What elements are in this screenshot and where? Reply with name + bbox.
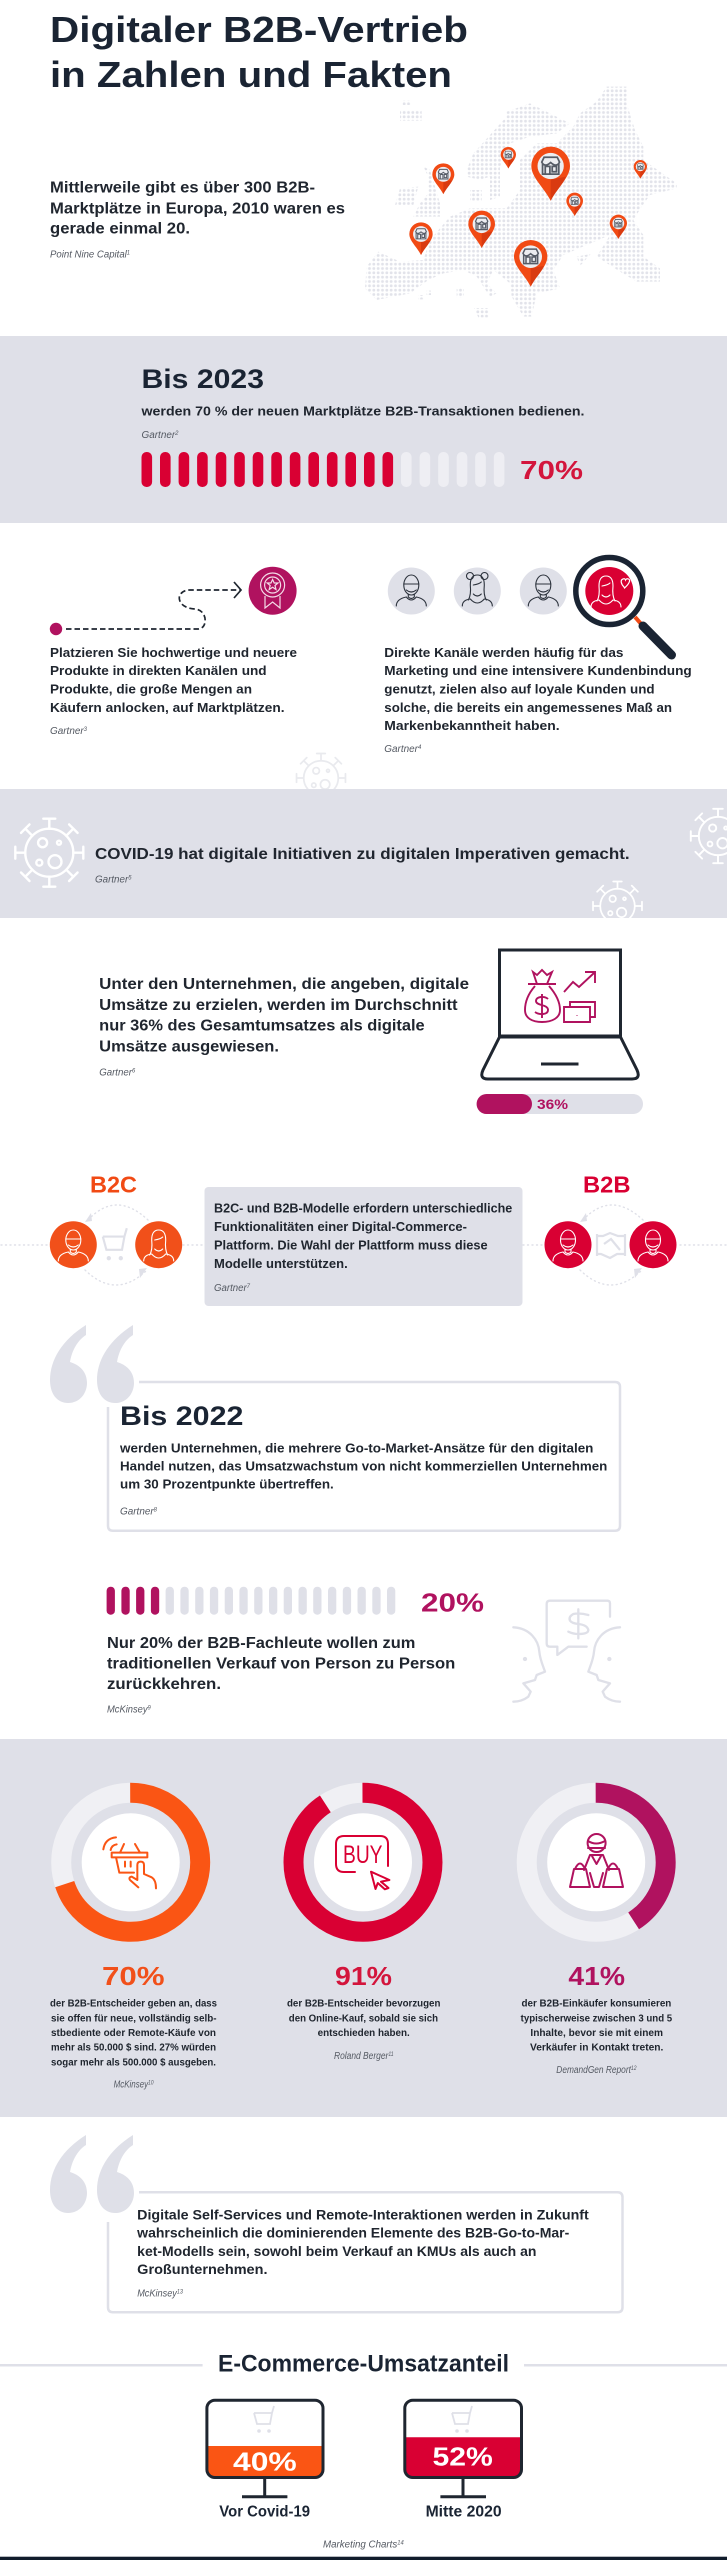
text: direct channels: [384, 646, 692, 755]
text: digital revenue: Umsätze zu erzielen, werden im Durchschnitt: [99, 997, 458, 1014]
text: direct channels: genutzt, zielen also auf loyale Kunden und: [384, 682, 655, 696]
text: person to person: Nur 20% der B2B-Fachleute wollen zum: [107, 1635, 415, 1652]
panel: statistics donuts: [0, 1739, 727, 2117]
text: digital revenue: nur 36% des Gesamtumsatzes als digitale: [99, 1018, 425, 1035]
source: marketing charts: Marketing Charts: [323, 2539, 399, 2550]
icon: shopper with bags: [570, 1834, 623, 1887]
panel: quote bis 2022: Handel nutzen, das Umsatzwachstum von nicht kommerziellen Unternehmen: [120, 1460, 607, 1474]
panel: bis 2023: [0, 336, 727, 523]
panel: bis 2023: werden 70 % der neuen Marktplätze B2B-Transaktionen bedienen.: [140, 404, 584, 419]
intro text block: gerade einmal 20.: [50, 220, 190, 238]
icon: buy button: [336, 1836, 389, 1889]
progress bar: 20 percent: 20%: [421, 1588, 484, 1618]
donut: 70 percent: McKinsey: [114, 2080, 157, 2091]
panel: bis 2023: 2: [174, 431, 179, 437]
icon: quotation mark: [50, 1325, 134, 1403]
icon: quotation mark: [50, 2135, 134, 2213]
panel: quote bis 2022: Bis 2022: [120, 1401, 243, 1431]
text: digital revenue: [99, 976, 469, 1079]
text: person to person: 9: [148, 1705, 151, 1711]
donut: 41 percent: 12: [631, 2066, 637, 2072]
text: placing products: 3: [84, 727, 88, 733]
donut: 70 percent: sogar mehr als 500.000 $ ausgeben.: [51, 2057, 216, 2068]
panel: b2c and b2b callout: Gartner: [214, 1283, 248, 1294]
text: direct channels: Direkte Kanäle werden häufig für das: [384, 646, 624, 660]
panel: quote self services: Digitale Self-Services und Remote-Interaktionen werden in Zukunft: [137, 2207, 589, 2222]
chart: monitor 52 percent: [405, 2400, 522, 2521]
chart: monitor 52 percent: 52%: [432, 2442, 493, 2472]
icon: basket and hand: [103, 1837, 156, 1888]
donut: 91 percent: 91%: [335, 1961, 392, 1991]
donut: 91 percent: Roland Berger: [334, 2051, 398, 2062]
heading: e-commerce share: E-Commerce-Umsatzanteil: [218, 2351, 509, 2378]
icon: customers and magnifier: [388, 558, 672, 655]
donut: 41 percent: Verkäufer in Kontakt treten.: [530, 2043, 664, 2054]
icon: laptop with money: [482, 950, 638, 1079]
icon: handshake: [596, 1233, 626, 1258]
panel: quote self services: wahrscheinlich die dominierenden Elemente des B2B-Go-to-Mar-: [136, 2226, 569, 2241]
text: placing products: Produkte in direkten Kanälen und: [50, 664, 267, 678]
donut: 41 percent: Inhalte, bevor sie mit einem: [530, 2028, 663, 2039]
icon: two faces with speech bubble: [513, 1601, 620, 1702]
text: digital revenue: 6: [132, 1069, 136, 1075]
donut: 41 percent: der B2B-Einkäufer konsumieren: [522, 1999, 671, 2010]
text: direct channels: Markenbekanntheit haben.: [384, 719, 560, 733]
dotted connector lines: [1, 1205, 727, 1285]
icon: buy button: BUY: [343, 1841, 383, 1869]
panel: bis 2023: Gartner: [142, 430, 175, 441]
panel: quote self services: Großunternehmen.: [137, 2262, 268, 2277]
text: direct channels: 4: [418, 745, 422, 751]
chart: monitor 52 percent: Mitte 2020: [426, 2504, 502, 2521]
donut: 91 percent: den Online-Kauf, sobald sie sich: [289, 2014, 438, 2025]
text: direct channels: Marketing und eine intensivere Kundenbindung: [384, 664, 692, 678]
progress bar: 36 percent: 36%: [537, 1096, 569, 1112]
icon: dashed path to award: [50, 567, 297, 635]
text: person to person: traditionellen Verkauf von Person zu Person: [107, 1656, 455, 1673]
text: placing products: Platzieren Sie hochwertige und neuere: [50, 646, 297, 660]
donut: 70 percent: mehr als 50.000 $ sind. 27% würden: [51, 2043, 216, 2054]
donut: 91 percent: der B2B-Entscheider bevorzugen: [287, 1999, 440, 2010]
text: placing products: Gartner: [50, 726, 84, 737]
intro text block: [50, 180, 345, 261]
donut: 91 percent: [287, 1793, 440, 2062]
donut: 70 percent: 70%: [102, 1961, 165, 1991]
progress bar: 36 percent: [477, 1094, 643, 1114]
intro text block: Point Nine Capital: [50, 250, 130, 261]
icon: white viruses: [15, 809, 727, 930]
donut: 70 percent: der B2B-Entscheider geben an, dass: [50, 1999, 217, 2010]
panel: b2c: B2C: [90, 1172, 137, 1198]
chart: monitor 40 percent: Vor Covid-19: [219, 2504, 310, 2521]
donut: 70 percent: [50, 1793, 217, 2091]
donut: 41 percent: DemandGen Report: [556, 2065, 646, 2076]
panel: covid: COVID-19 hat digitale Initiativen zu digitalen Imperativen gemacht.: [95, 846, 630, 863]
donut: 70 percent: 10: [148, 2081, 154, 2087]
text: placing products: Produkte, die große Mengen an: [50, 682, 252, 696]
source: marketing charts: 14: [397, 2540, 404, 2546]
panel: b2c and b2b callout: 7: [247, 1284, 251, 1290]
value: 70 percent: 70%: [520, 455, 583, 485]
panel: quote self services: [50, 2135, 622, 2312]
intro text block: Mittlerweile gibt es über 300 B2B-: [50, 180, 315, 197]
donut: 41 percent: 41%: [568, 1961, 625, 1991]
icon: virus above band: [296, 752, 346, 789]
progress bar: 70 percent: [142, 452, 504, 487]
panel: b2c and b2b callout: Plattform. Die Wahl der Plattform muss diese: [214, 1239, 488, 1253]
panel: quote bis 2022: um 30 Prozentpunkte übertreffen.: [120, 1478, 334, 1492]
panel: quote bis 2022: werden Unternehmen, die mehrere Go-to-Market-Ansätze für den digitalen: [119, 1441, 593, 1455]
text: person to person: [107, 1635, 455, 1715]
panel: b2b: [544, 1172, 676, 1278]
footer bar: [0, 2557, 727, 2560]
text: placing products: Käufern anlocken, auf Marktplätzen.: [50, 701, 285, 715]
panel: b2c and b2b callout: Modelle unterstützen.: [214, 1257, 348, 1271]
text: person to person: McKinsey: [107, 1704, 150, 1715]
panel: quote bis 2022: [50, 1325, 620, 1531]
panel: quote bis 2022: Gartner: [120, 1506, 154, 1517]
donut: 41 percent: typischerweise zwischen 3 und 5: [521, 2014, 672, 2025]
text: digital revenue: Gartner: [99, 1068, 133, 1079]
title: in Zahlen und Fakten: [50, 54, 452, 95]
donut: 41 percent: [521, 1793, 672, 2076]
panel: covid: Gartner: [95, 875, 129, 886]
donut: 70 percent: stbediente oder Remote-Käufe von: [51, 2028, 216, 2039]
progress bar: 20 percent: [107, 1587, 484, 1618]
panel: b2b: B2B: [583, 1172, 630, 1198]
panel: bis 2023: Bis 2023: [142, 364, 264, 394]
title: [50, 9, 468, 95]
text: direct channels: Gartner: [384, 744, 418, 755]
text: digital revenue: Unter den Unternehmen, die angeben, digitale: [99, 976, 469, 993]
text: placing products: [50, 646, 297, 737]
panel: quote bis 2022: 8: [154, 1507, 158, 1513]
panel: covid: 5: [128, 876, 132, 882]
title: Digitaler B2B-Vertrieb: [50, 9, 468, 50]
panel: covid: [0, 789, 727, 930]
panel: quote self services: 13: [177, 2290, 184, 2296]
panel: b2c and b2b callout: B2C- und B2B-Modelle erfordern unterschiedliche: [214, 1202, 512, 1216]
text: digital revenue: Umsätze ausgewiesen.: [99, 1039, 279, 1056]
text: direct channels: solche, die bereits ein angemessenes Maß an: [384, 701, 672, 715]
europe dot map with pins: [365, 87, 677, 317]
chart: monitor 40 percent: [207, 2400, 323, 2521]
panel: b2c: [50, 1172, 182, 1278]
intro text block: Marktplätze in Europa, 2010 waren es: [50, 200, 345, 217]
panel: b2c and b2b callout: Funktionalitäten einer Digital-Commerce-: [214, 1220, 467, 1234]
intro text block: 1: [127, 251, 130, 257]
panel: quote self services: ket-Modells sein, sowohl beim Verkauf an KMUs als auch an: [137, 2244, 536, 2259]
chart: monitor 40 percent: 40%: [233, 2447, 297, 2477]
text: person to person: zurückkehren.: [107, 1676, 221, 1693]
panel: quote self services: McKinsey: [137, 2289, 181, 2300]
donut: 70 percent: sie offen für neue, vollständig selb-: [51, 2014, 217, 2025]
panel: b2c and b2b callout: [204, 1187, 522, 1306]
donut: 91 percent: entschieden haben.: [318, 2028, 410, 2039]
donut: 91 percent: 11: [388, 2052, 394, 2058]
